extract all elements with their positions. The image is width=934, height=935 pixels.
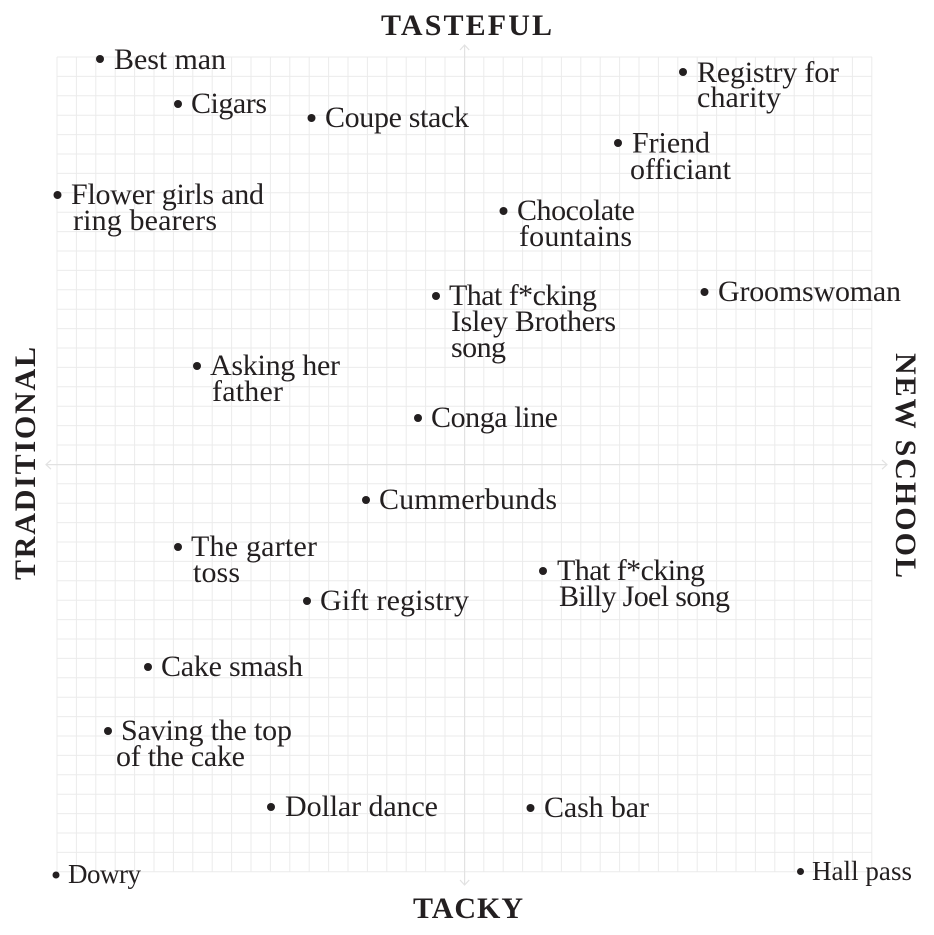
item: chocolate fountains: Chocolate [517, 194, 635, 227]
item: registry for charity: Registry for [697, 56, 839, 89]
item: gift registry: Gift registry [320, 584, 469, 617]
item: chocolate fountains [500, 194, 635, 253]
item: the garter toss [174, 530, 317, 589]
heading: traditional: TRADITIONAL [9, 347, 42, 580]
item: coupe stack: Coupe stack [325, 101, 469, 134]
item: the garter toss: The garter [191, 530, 317, 563]
item: saving the top of the cake [104, 714, 292, 773]
item: cummerbunds: Cummerbunds [379, 483, 557, 516]
item: that song billy joel: Billy Joel song [559, 580, 730, 613]
item: that song isley brothers: That f*cking [449, 279, 597, 312]
item: registry for charity: charity [697, 81, 781, 114]
item: saving the top of the cake: Saving the top [121, 714, 292, 747]
item: groomswoman: Groomswoman [718, 275, 901, 308]
item: friend officiant: officiant [630, 153, 732, 186]
item: conga line: Conga line [431, 401, 558, 434]
item: registry for charity [679, 56, 839, 114]
item: friend officiant [614, 126, 732, 186]
item: hall pass: Hall pass [812, 856, 912, 886]
heading: new school: NEW SCHOOL [889, 353, 922, 578]
item: friend officiant: Friend [632, 126, 710, 160]
item: that song billy joel: That f*cking [557, 554, 705, 587]
item: that song isley brothers: song [451, 331, 506, 364]
item: asking her father [193, 349, 340, 408]
item: asking her father: Asking her [210, 349, 340, 382]
item: dollar dance: Dollar dance [285, 790, 438, 823]
item: asking her father: father [212, 375, 283, 408]
item: cake smash: Cake smash [161, 650, 303, 683]
item: the garter toss: toss [193, 556, 240, 589]
heading: tacky: TACKY [413, 892, 523, 925]
item: best man: Best man [114, 43, 226, 76]
item: dowry: Dowry [68, 859, 142, 889]
item: cash bar: Cash bar [544, 791, 649, 824]
item: cigars: Cigars [191, 87, 267, 120]
item: flower girls and ring bearers [54, 178, 264, 237]
item: that song isley brothers: Isley Brothers [451, 305, 616, 338]
item: saving the top of the cake: of the cake [116, 740, 245, 773]
item: that song isley brothers [432, 279, 616, 364]
item: chocolate fountains: fountains [519, 220, 632, 253]
item: flower girls and ring bearers: Flower girls and [71, 178, 264, 211]
item: that song billy joel [539, 554, 730, 613]
item: flower girls and ring bearers: ring bearers [73, 204, 217, 237]
heading: tasteful: TASTEFUL [381, 9, 552, 42]
